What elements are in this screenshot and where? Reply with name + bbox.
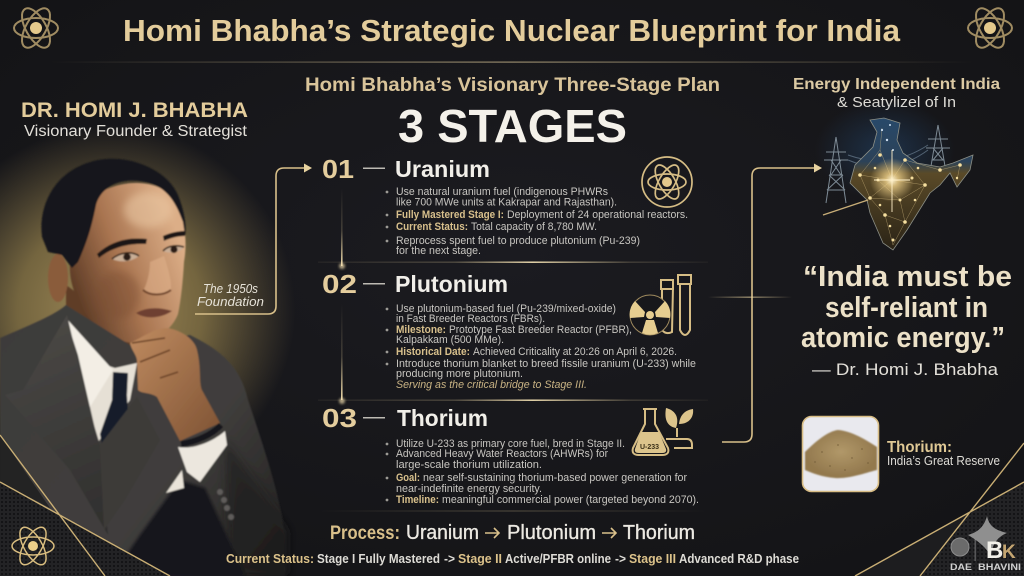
panel: stage 2 plutonium: Historical Date: [396, 346, 470, 358]
arrow: foundation to stage 1 [195, 164, 312, 314]
panel: stage 1 uranium: Use natural uranium fuel (indigenous PHWRs [396, 186, 609, 198]
panel: stage 2 plutonium: Use plutonium-based fuel (Pu-239/mixed-oxide) [396, 303, 616, 315]
current status line: Advanced R&D phase [679, 551, 799, 566]
current status line: -> [444, 551, 455, 566]
neck [66, 285, 138, 380]
panel: stage 2 plutonium: Milestone: [396, 324, 446, 336]
logos: DAE and BHAVINI: BHAVINI [978, 562, 1021, 572]
panel: stage 3 thorium: meaningful commercial power (targeted beyond 2070). [442, 494, 699, 506]
nose and mouth [144, 256, 171, 294]
energy independent heading: & Seatylizel of In [837, 95, 956, 111]
quote: “India must be [803, 261, 1012, 293]
subtitle: Homi Bhabha’s Visionary Three-Stage Plan [305, 75, 720, 96]
watch [181, 425, 221, 444]
process line: Thorium [623, 522, 695, 544]
panel: stage 1 uranium: for the next stage. [396, 245, 481, 257]
panel: stage 1 uranium: Fully Mastered Stage I: [396, 209, 504, 221]
panel: stage 3 thorium: Advanced Heavy Water Reactors (AHWRs) for [396, 448, 608, 460]
panel: stage 3 thorium: Timeline: [396, 494, 439, 506]
panel: stage 2 plutonium [322, 269, 696, 391]
panel: stage 3 thorium: Utilize U-233 as primary core fuel, bred in Stage II. [396, 438, 625, 450]
name block: DR. HOMI J. BHABHA [21, 99, 248, 122]
icon: U-233 flask and plant: U-233 [640, 444, 659, 451]
current status line: Stage II [458, 551, 502, 566]
arrow: stage 2 to stage 3 [339, 304, 345, 404]
quote: — Dr. Homi J. Bhabha [812, 360, 999, 379]
icon: left pylon [824, 137, 848, 203]
panel: stage 3 thorium: 03 [322, 403, 357, 433]
panel: stage 3 thorium: near-indefinite energy security. [396, 483, 542, 495]
icon: bottom left atom [12, 523, 54, 569]
icon: radiation symbol and test tubes [630, 275, 691, 335]
panel: stage 2 plutonium: Achieved Criticality at 20:26 on April 6, 2026. [473, 346, 677, 358]
name block: Visionary Founder & Strategist [24, 123, 248, 140]
callout: the 1950s foundation: Foundation [197, 295, 264, 309]
panel: stage 2 plutonium: producing more plutonium. [396, 368, 523, 380]
hand [130, 328, 220, 441]
callout: the 1950s foundation: The 1950s [203, 282, 258, 296]
panel: stage 1 uranium: 01 [322, 154, 354, 184]
lapels [5, 315, 108, 535]
process line: Uranium [406, 522, 479, 544]
arrow: stages to energy independent India [708, 164, 822, 442]
panel: stage 2 plutonium: Kalpakkam (500 MMe). [396, 334, 504, 346]
process line: Plutonium [507, 522, 596, 544]
panel: stage 1 uranium: Reprocess spent fuel to produce plutonium (Pu-239) [396, 235, 640, 247]
panel: stage 1 uranium [322, 154, 688, 257]
panel: stage 3 thorium: Thorium [397, 405, 488, 431]
quote: atomic energy.” [801, 322, 1005, 354]
quote [801, 261, 1012, 379]
panel: stage 2 plutonium: Introduce thorium blanket to breed fissile uranium (U-233) while [396, 358, 696, 370]
current status line: Stage III [629, 551, 676, 566]
panel: stage 2 plutonium: Prototype Fast Breeder Reactor (PFBR), [449, 324, 632, 336]
current status line: Current Status: [226, 551, 314, 566]
hair [41, 159, 186, 268]
logos: DAE and BHAVINI: B [986, 537, 1003, 564]
quote: self-reliant in [825, 292, 988, 324]
thorium caption: India’s Great Reserve [887, 454, 1000, 468]
icon: right pylon [848, 125, 950, 172]
current status line: -> [615, 551, 626, 566]
cuff [178, 431, 227, 482]
logos: DAE and BHAVINI: K [1002, 542, 1016, 563]
logos: DAE and BHAVINI [950, 516, 1021, 572]
sleeve buttons [217, 489, 234, 520]
panel: stage 1 uranium: like 700 MWe units at Kakrapar and Rajasthan). [396, 196, 617, 208]
brows [97, 238, 147, 258]
panel: stage 1 uranium: Uranium [395, 156, 490, 182]
process line: Process: [330, 523, 400, 544]
pocket square [166, 470, 184, 493]
India outline [850, 118, 973, 250]
current status line [226, 551, 799, 566]
tie [100, 372, 128, 490]
shirt [66, 318, 137, 442]
panel: stage 1 uranium: Current Status: [396, 221, 468, 233]
bottom left corner decoration [0, 435, 170, 576]
callout: the 1950s foundation [197, 282, 264, 309]
panel: stage 3 thorium: large-scale thorium utilization. [396, 459, 542, 471]
suit [0, 305, 285, 576]
energy independent heading [793, 76, 1000, 111]
panel: stage 1 uranium: Deployment of 24 operational reactors. [507, 209, 688, 221]
panel: stage 2 plutonium: 02 [322, 269, 357, 299]
thorium caption: Thorium: [887, 439, 952, 456]
panel: stage 2 plutonium: Plutonium [395, 271, 508, 297]
panel: stage 2 plutonium: in Fast Breeder Reactors (FBRs). [396, 313, 545, 325]
heading: 3 stages: 3 STAGES [398, 100, 627, 152]
title: Homi Bhabha’s Strategic Nuclear Blueprint for India [123, 13, 901, 48]
icon: top right atom [968, 4, 1012, 52]
ear [48, 254, 68, 302]
sleeve fade [225, 440, 290, 576]
panel: stage 2 plutonium: Serving as the critical bridge to Stage III. [396, 379, 587, 391]
panel: stage 3 thorium: near self-sustaining thorium-based power generation for [423, 472, 687, 484]
icon: U-233 flask and plant [633, 408, 693, 455]
panel: stage 3 thorium [322, 403, 699, 506]
name block [21, 99, 248, 140]
face [70, 183, 186, 343]
current status line: Active/PFBR online [505, 551, 611, 566]
panel: stage 3 thorium: Goal: [396, 472, 420, 484]
logos: DAE and BHAVINI: DAE [950, 562, 972, 572]
icon: top left atom [14, 4, 58, 52]
thorium sand photo [802, 416, 878, 492]
thorium caption [887, 439, 1000, 468]
panel: portrait of Dr. Homi J. Bhabha [0, 120, 320, 576]
icon: uranium atom in circle [642, 157, 692, 207]
panel: stage 1 uranium: Total capacity of 8,780 MW. [471, 221, 597, 233]
arrow: stage 1 to stage 2 [339, 188, 345, 269]
process line [330, 522, 695, 544]
energy independent heading: Energy Independent India [793, 76, 1000, 93]
current status line: Stage I Fully Mastered [317, 551, 440, 566]
illustration: glowing India map with pylons [815, 100, 973, 250]
bottom right corner decoration [855, 443, 1024, 576]
eyes [112, 254, 139, 261]
